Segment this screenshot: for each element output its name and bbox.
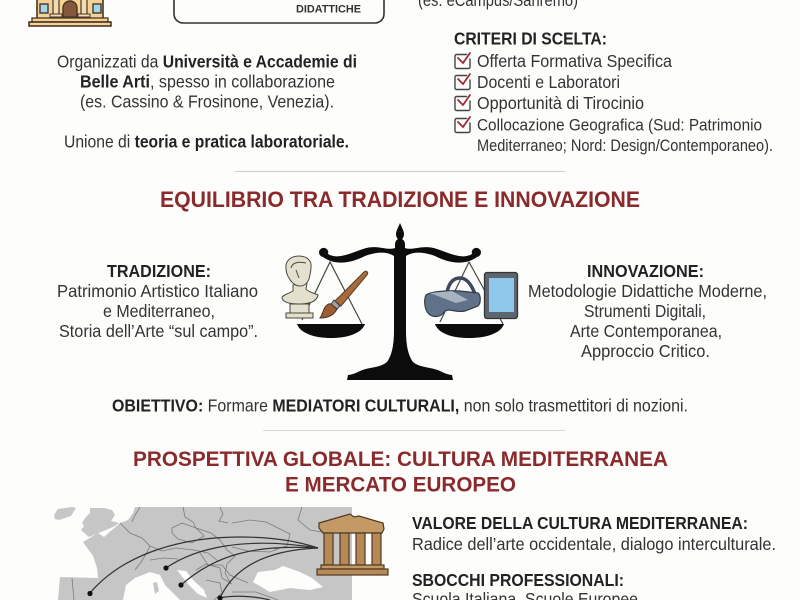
borders bbox=[72, 507, 328, 600]
icon: Greek temple bbox=[317, 514, 388, 575]
heading: criteri di scelta: CRITERI DI SCELTA: bbox=[454, 28, 607, 48]
text block: tradizione: e Mediterraneo, bbox=[103, 301, 215, 321]
text block: value and careers bbox=[412, 513, 776, 600]
callout box: didattiche: DIDATTICHE bbox=[296, 4, 361, 16]
city dots bbox=[87, 565, 223, 600]
map: Europe with arcs bbox=[54, 507, 352, 600]
seas bbox=[123, 572, 180, 600]
text block: value and careers: SBOCCHI PROFESSIONALI: bbox=[412, 570, 624, 590]
icon: VR headset bbox=[425, 278, 480, 317]
icon: paintbrush bbox=[320, 271, 368, 318]
icons: check marks bbox=[455, 53, 470, 132]
icon: tablet bbox=[484, 272, 518, 318]
land masses bbox=[58, 507, 352, 600]
text block: tradizione: Patrimonio Artistico Italiano bbox=[57, 281, 258, 301]
text block: organisers: Unione di teoria e pratica laboratoriale. bbox=[64, 132, 349, 152]
checklist: selection criteria: Opportunità di Tirocinio bbox=[477, 93, 644, 113]
text block: value and careers: VALORE DELLA CULTURA MEDITERRANEA: bbox=[412, 513, 748, 533]
callout box: didattiche bbox=[174, 0, 384, 23]
text block: organisers: Organizzati da Università e Accademie di bbox=[57, 52, 357, 72]
text block: organisers: (es. Cassino & Frosinone, Venezia). bbox=[80, 92, 334, 112]
text block: innovazione: Strumenti Digitali, bbox=[584, 301, 706, 321]
heading: prospettiva globale: E MERCATO EUROPEO bbox=[285, 474, 516, 496]
heading: equilibrio: EQUILIBRIO TRA TRADIZIONE E INNOVAZIONE bbox=[160, 187, 640, 212]
text block: tradizione bbox=[57, 261, 258, 341]
heading: prospettiva globale: PROSPETTIVA GLOBALE: CULTURA MEDITERRANEA bbox=[133, 448, 668, 471]
illustration: balance scale bbox=[282, 223, 518, 380]
checklist: selection criteria: Offerta Formativa Specifica bbox=[477, 51, 672, 71]
text block: tradizione: Storia dell’Arte “sul campo”. bbox=[59, 321, 258, 341]
text block: innovazione: Arte Contemporanea, bbox=[570, 321, 722, 341]
heading: prospettiva globale bbox=[133, 448, 668, 496]
text: objective: OBIETTIVO: Formare MEDIATORI CULTURALI, non solo trasmettitori di nozioni. bbox=[112, 396, 688, 416]
icon: university building bbox=[29, 0, 111, 26]
checklist: selection criteria bbox=[454, 28, 773, 155]
icon: classical bust bbox=[282, 256, 318, 318]
text block: innovazione: INNOVAZIONE: bbox=[587, 261, 704, 281]
text block: innovazione: Metodologie Didattiche Moderne, bbox=[528, 281, 767, 301]
text block: innovazione: Approccio Critico. bbox=[581, 341, 710, 361]
text block: organisers: Belle Arti, spesso in collaborazione bbox=[80, 72, 335, 92]
scale structure bbox=[297, 223, 504, 380]
text block: organisers bbox=[57, 52, 357, 152]
arcs bbox=[90, 537, 318, 600]
text block: innovazione bbox=[528, 261, 767, 361]
text block: value and careers: Radice dell’arte occidentale, dialogo interculturale. bbox=[412, 534, 776, 554]
text block: tradizione: TRADIZIONE: bbox=[107, 261, 211, 281]
checklist: selection criteria: Docenti e Laboratori bbox=[477, 72, 620, 92]
checklist: selection criteria: Collocazione Geografica (Sud: Patrimonio bbox=[477, 116, 762, 134]
